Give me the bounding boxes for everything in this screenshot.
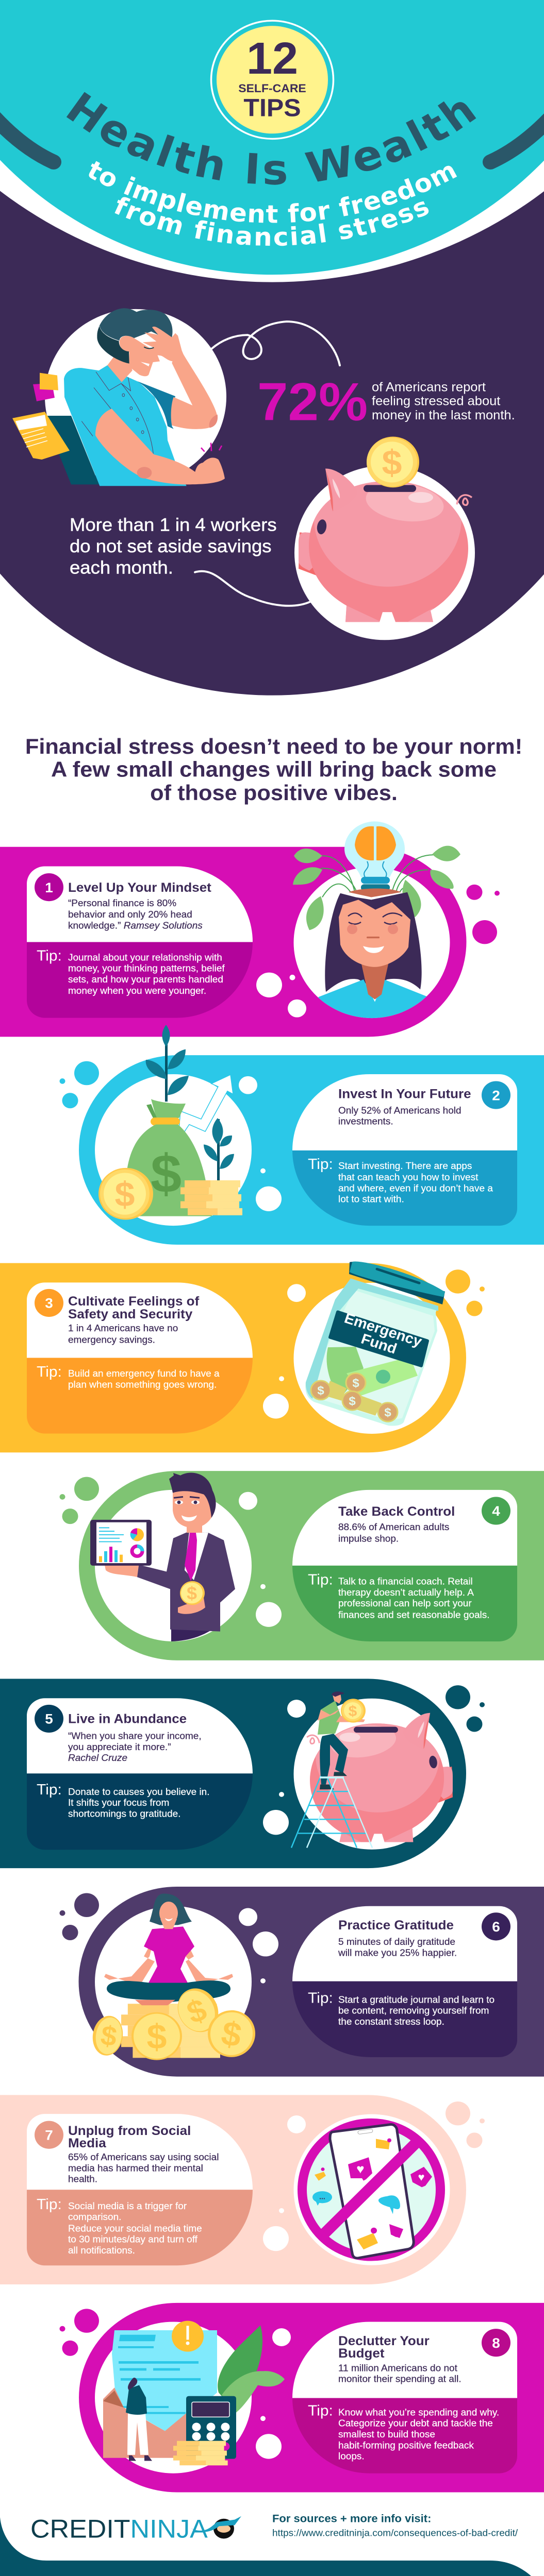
panel 5 card: Live in Abundance — [68, 1712, 187, 1726]
panel 3 card: 3 — [45, 1295, 53, 1311]
panel 3 card — [27, 1282, 253, 1434]
panel 7 card: Social media is a trigger for — [68, 2200, 187, 2211]
panel 1 card: behavior and only 20% head — [68, 909, 192, 920]
badge: 12 self-care tips: 12 — [246, 33, 298, 83]
panel 2 bubbles — [60, 1061, 282, 1211]
panel 6 card: will make you 25% happier. — [338, 1947, 457, 1958]
illustration: person on ladder with piggy bank: $ — [349, 1703, 357, 1720]
panel 1 card: “Personal finance is 80% — [68, 897, 176, 908]
badge: 12 self-care tips — [211, 21, 333, 139]
panel 7 card: all notifications. — [68, 2245, 135, 2256]
panel 5 card — [27, 1698, 253, 1850]
panel 8 card: Budget — [338, 2347, 385, 2361]
panel 3 card: emergency savings. — [68, 1334, 155, 1345]
panel 4 card: Tip: — [308, 1571, 333, 1588]
stat: 72%: of Americans report — [372, 380, 486, 394]
illustration: stressed man — [12, 308, 226, 486]
panel 6 bubbles — [60, 1893, 278, 1984]
panel 5 card: you appreciate it more.” — [68, 1741, 171, 1752]
stat: 72%: feeling stressed about — [372, 394, 500, 408]
panel 1: level up your mindset — [0, 821, 500, 1037]
panel 6 card: Tip: — [308, 1990, 333, 2006]
illustration: emergency fund jar: $ — [352, 1377, 359, 1390]
illustration: emergency fund jar: Emergency — [342, 1310, 424, 1350]
panel 5 card: It shifts your focus from — [68, 1798, 169, 1808]
illustration: meditating woman on coins — [90, 1894, 259, 2061]
footer band — [0, 2517, 531, 2576]
panel 7 card: 7 — [45, 2127, 53, 2143]
panel 2 card: Tip: — [308, 1156, 333, 1173]
stat: savings — [70, 514, 277, 578]
panel 8 card: loops. — [338, 2451, 365, 2462]
panel 2 card — [292, 1074, 517, 1226]
illustration: person on ladder with piggy bank — [291, 1691, 453, 1848]
panel 8 card: habit-forming positive feedback — [338, 2440, 474, 2450]
panel 7 card: Media — [68, 2136, 106, 2150]
panel 7 card: media has harmed their mental — [68, 2163, 203, 2173]
panel 4 card — [292, 1490, 517, 1641]
panel 4 card: 88.6% of American adults — [338, 1521, 449, 1532]
panel 5 card: “When you share your income, — [68, 1731, 202, 1741]
panel 8 card: Know what you’re spending and why. — [338, 2407, 499, 2417]
panel 7: unplug from social media — [0, 2095, 485, 2284]
illustration: money bag with plant and arrow: $ — [151, 1144, 182, 1204]
sources: For sources + more info visit: — [272, 2512, 431, 2524]
stat: 72% — [257, 372, 515, 432]
illustration: businessman with tablet — [90, 1473, 235, 1641]
panel 1 card: sets, and how your parents handled — [68, 974, 223, 985]
panel 2: invest in your future — [60, 1025, 544, 1245]
panel 7 card: Reduce your social media time — [68, 2223, 202, 2233]
stat: savings: each month. — [70, 557, 173, 578]
panel 1 card: Tip: — [37, 947, 62, 964]
panel 5 card: shortcomings to gratitude. — [68, 1808, 181, 1819]
panel 3: cultivate feelings of safety — [0, 1262, 485, 1452]
background: purple circle — [0, 5, 544, 696]
panel 7 card: Tip: — [37, 2196, 62, 2213]
subtitle: to implement for freedom — [89, 161, 457, 223]
illustration: no phone sign: ... — [319, 2193, 325, 2201]
badge: 12 self-care tips: SELF-CARE — [238, 82, 306, 95]
panel 1 card: money when you were younger. — [68, 985, 206, 996]
illustration: businessman with tablet: $ — [187, 1583, 197, 1604]
panel 6 card: the constant stress loop. — [338, 2016, 444, 2027]
panel 7 card: 65% of Americans say using social — [68, 2151, 219, 2162]
panel 8 card: monitor their spending at all. — [338, 2374, 461, 2384]
panel 4 card: professional can help sort your — [338, 1598, 472, 1608]
illustration: woman with lightbulb brain — [293, 821, 460, 1022]
illustration: emergency fund jar: $ — [349, 1395, 356, 1408]
illustration: meditating woman on coins: $ — [219, 2014, 244, 2055]
panel 3 card: Safety and Security — [68, 1307, 193, 1321]
illustration: piggy bank — [294, 437, 475, 640]
panel 5 bubbles — [263, 1685, 485, 1835]
stat: 72%: 72% — [257, 372, 368, 432]
panel 4 bubbles — [60, 1477, 282, 1627]
panel 8 bubbles — [60, 2309, 291, 2459]
panel 8 card: Categorize your debt and tackle the — [338, 2418, 493, 2429]
illustration: emergency fund jar: $ — [317, 1384, 324, 1398]
panel 6 card — [292, 1906, 517, 2057]
panel 8 card: smallest to build those — [338, 2429, 435, 2439]
illustration: emergency fund jar: $ — [384, 1406, 391, 1420]
stat: 72%: money in the last month. — [372, 409, 515, 422]
illustration: no phone sign: ♥ — [418, 2171, 425, 2183]
panel 1 card: money, your thinking patterns, belief — [68, 963, 225, 974]
panel 6 card: Start a gratitude journal and learn to — [338, 1994, 494, 2005]
panel 2 card: Invest In Your Future — [338, 1087, 471, 1101]
panel 7 card — [27, 2114, 253, 2265]
panel 6 card: Practice Gratitude — [338, 1919, 454, 1933]
heading — [25, 734, 522, 805]
panel 3 card: Tip: — [37, 1364, 62, 1380]
panel 8 card: Tip: — [308, 2402, 333, 2419]
badge: 12 self-care tips: TIPS — [243, 94, 301, 122]
panel 2 card: lot to start with. — [338, 1194, 404, 1205]
panel 6 card: 6 — [492, 1919, 500, 1935]
panel 7 card: Unplug from Social — [68, 2124, 191, 2138]
panel 8: declutter your budget — [60, 2303, 544, 2492]
illustration: money bag with plant and arrow: $ — [115, 1175, 135, 1214]
illustration: bill, envelope, calculator — [103, 2321, 285, 2465]
panel 7 card: to 30 minutes/day and turn off — [68, 2234, 198, 2245]
panel 6 card: be content, removing yourself from — [338, 2005, 489, 2016]
panel 8 card — [292, 2322, 517, 2473]
panel 5 card: 5 — [45, 1711, 53, 1726]
panel 5 card: Rachel Cruze — [68, 1752, 127, 1763]
panel 1 card: Journal about your relationship with — [68, 952, 222, 962]
panel 3 bubbles — [263, 1269, 485, 1418]
stat: savings: More than 1 in 4 workers — [70, 514, 277, 535]
subtitle: from financial stress — [114, 197, 429, 246]
panel 1 card: knowledge.” Ramsey Solutions — [68, 920, 203, 930]
panel 4 card: impulse shop. — [338, 1533, 399, 1544]
panel 7 card: comparison. — [68, 2211, 121, 2222]
panel 2 card: 2 — [492, 1088, 500, 1103]
logo: creditninja: CREDITNINJA — [30, 2514, 208, 2543]
panel 3 card: plan when something goes wrong. — [68, 1379, 217, 1389]
illustration: emergency fund jar — [305, 1262, 445, 1426]
panel 2 card: Start investing. There are apps — [338, 1160, 472, 1171]
illustration: money bag with plant and arrow — [98, 1025, 242, 1219]
sources: https://www.creditninja.com/consequences-of-bad-credit/ — [272, 2528, 518, 2538]
panel 8 card: 8 — [492, 2335, 500, 2351]
panel 3 card: 1 in 4 Americans have no — [68, 1323, 178, 1333]
header: white band and teal arc — [0, 0, 544, 282]
panel 7 bubbles — [263, 2102, 485, 2251]
panel 1 card — [27, 867, 253, 1018]
panel 3 card: Build an emergency fund to have a — [68, 1368, 220, 1379]
panel 2 card: investments. — [338, 1116, 393, 1127]
arc strokes beside title — [0, 112, 544, 162]
panel 1 card: Level Up Your Mindset — [68, 880, 211, 895]
panel 4 card: finances and set reasonable goals. — [338, 1609, 490, 1620]
heading: of those positive vibes. — [150, 781, 398, 805]
panel 4 card: 4 — [492, 1503, 500, 1519]
illustration: emergency fund jar: Fund — [359, 1331, 399, 1357]
panel 5 card: Tip: — [37, 1781, 62, 1798]
stat: savings: do not set aside savings — [70, 536, 272, 556]
heading: Financial stress doesn’t need to be your norm! — [25, 734, 522, 759]
title: Health Is Wealth — [66, 92, 476, 185]
stress scribble — [211, 321, 340, 365]
panel 4 card: Talk to a financial coach. Retail — [338, 1576, 473, 1587]
panel 2 card: that can teach you how to invest — [338, 1172, 479, 1182]
panel 8 card: Declutter Your — [338, 2334, 430, 2348]
illustration: no phone sign — [302, 2123, 440, 2258]
panel 5: live in abundance — [0, 1679, 485, 1868]
heading: A few small changes will bring back some — [51, 757, 497, 782]
illustration: no phone sign: ♥ — [356, 2162, 365, 2176]
panel 8 card: 11 million Americans do not — [338, 2363, 458, 2373]
panel 1 card: 1 — [45, 879, 53, 895]
panel 4: take back control — [60, 1471, 544, 1660]
sources — [272, 2512, 518, 2538]
panel 6: practice gratitude — [60, 1887, 544, 2077]
illustration: meditating woman on coins: $ — [147, 2017, 167, 2056]
panel 4 card: therapy doesn’t actually help. A — [338, 1587, 474, 1598]
panel 2 card: and where, even if you don’t have a — [338, 1183, 493, 1193]
panel 3 card: Cultivate Feelings of — [68, 1294, 200, 1309]
callout line — [195, 571, 310, 606]
panel 7 card: health. — [68, 2174, 97, 2184]
illustration: meditating woman on coins: $ — [98, 2020, 119, 2052]
illustration: piggy bank: $ — [382, 443, 402, 482]
panel 4 card: Take Back Control — [338, 1505, 455, 1519]
illustration: meditating woman on coins: $ — [182, 1992, 211, 2030]
panel 2 card: Only 52% of Americans hold — [338, 1105, 461, 1115]
panel 5 card: Donate to causes you believe in. — [68, 1786, 210, 1797]
panel 1 bubbles — [256, 885, 500, 1018]
panel 6 card: 5 minutes of daily gratitude — [338, 1936, 455, 1947]
